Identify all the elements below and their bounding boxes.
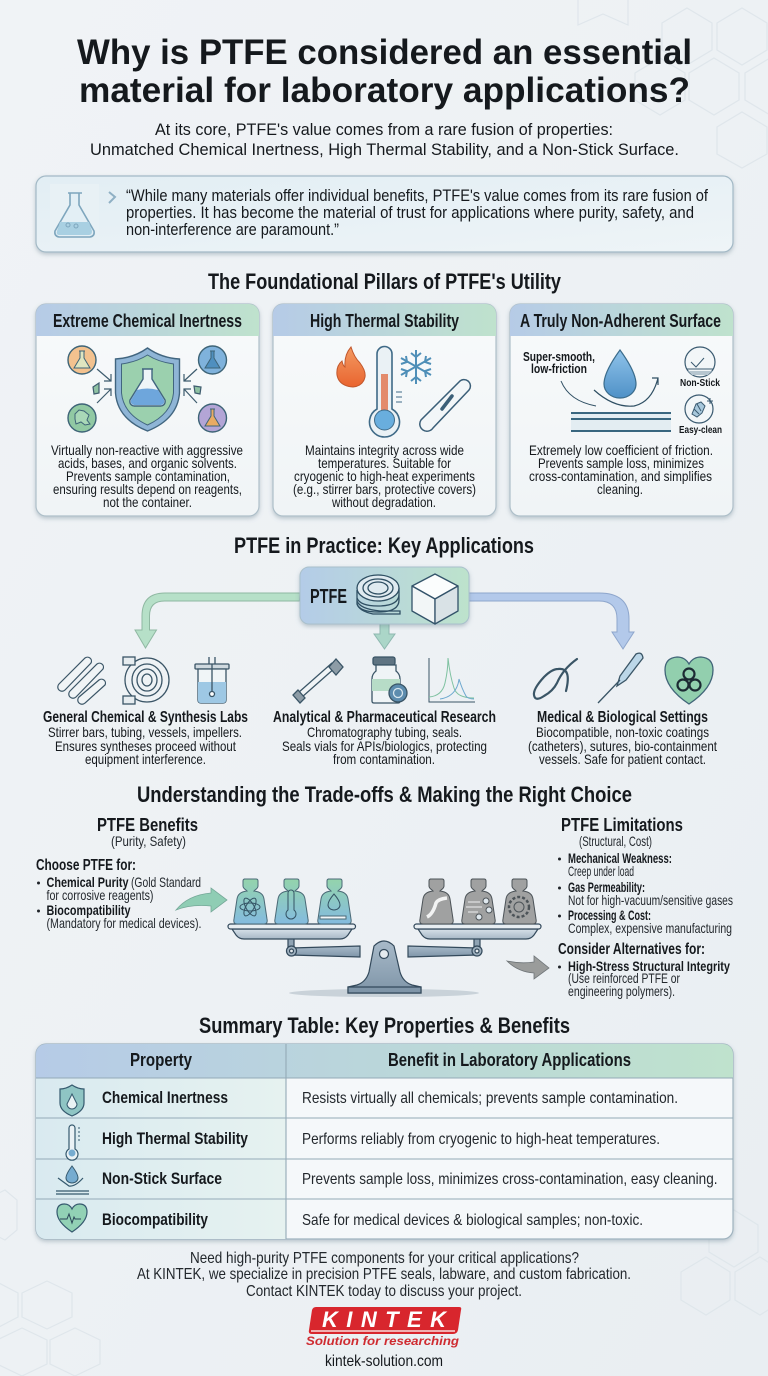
icon: tubing coil	[357, 575, 400, 614]
column text: Stirrer bars, tubing, vessels, impellers.	[48, 724, 242, 740]
panel: extreme chemical inertness	[36, 304, 259, 516]
column text: Biocompatible, non-toxic coatings	[536, 724, 709, 740]
box label: PTFE	[310, 586, 347, 608]
left pan	[228, 924, 356, 939]
title	[77, 33, 692, 110]
column text	[48, 724, 242, 767]
icon: easy-clean badge	[679, 395, 722, 436]
benefits list: Biocompatibility	[46, 902, 131, 918]
limitations list: Gas Permeability:	[568, 879, 645, 895]
card text	[293, 442, 476, 510]
column text: Chromatography tubing, seals.	[307, 724, 462, 740]
panel: non-adherent surface	[510, 304, 733, 516]
scale illustration	[228, 879, 541, 997]
table header: Property	[130, 1050, 192, 1070]
icon: biohazard heart	[665, 657, 713, 704]
card text: Extremely low coefficient of friction.	[529, 442, 713, 458]
heading: trade-offs: Understanding the Trade-offs & Making the Right Choice	[137, 782, 632, 807]
summary table	[36, 1044, 733, 1239]
row: chemical inertness: Chemical Inertness	[102, 1089, 228, 1107]
title: material for laboratory applications?	[79, 71, 690, 110]
call to action: Need high-purity PTFE components for your critical applications?	[190, 1250, 579, 1267]
limitations list: Processing & Cost:	[568, 907, 651, 923]
choose heading: Choose PTFE for:	[36, 857, 136, 874]
row: non-stick surface	[56, 1166, 718, 1194]
website: kintek-solution.com	[325, 1353, 443, 1370]
icon: non-stick badge	[680, 347, 720, 389]
arrow: limitations to alternatives	[507, 956, 549, 979]
icon: flask	[50, 184, 99, 244]
column title: General Chemical & Synthesis Labs	[43, 709, 248, 726]
column text: equipment interference.	[85, 751, 206, 767]
weights: limitations	[420, 879, 536, 924]
icon: shield with flask	[116, 348, 180, 431]
quote text: non-interference are paramount.”	[126, 220, 339, 239]
quote text: properties. It has become the material of trust for applications where purity, safety, and	[126, 203, 694, 222]
heading: applications: PTFE in Practice: Key Applications	[234, 533, 534, 558]
icon label	[523, 350, 595, 376]
column text	[282, 724, 487, 767]
call to action	[137, 1250, 631, 1300]
column text: vessels. Safe for patient contact.	[539, 751, 706, 767]
panel: general chemical labs	[43, 657, 248, 767]
arrow: to analytical research	[374, 624, 395, 649]
card text: (e.g., stirrer bars, protective covers)	[293, 481, 476, 497]
title: Why is PTFE considered an essential	[77, 33, 692, 72]
alternatives list: (Use reinforced PTFE or	[568, 970, 680, 986]
heading: pillars: The Foundational Pillars of PTFE's Utility	[208, 269, 562, 294]
beam and base	[286, 938, 482, 993]
row: chemical inertness: Resists virtually all chemicals; prevents sample contamination.	[302, 1090, 678, 1107]
card text: cross-contamination, and simplifies	[529, 468, 712, 484]
benefits list: (Gold Standard	[131, 874, 201, 890]
icon: PTFE cube	[412, 574, 458, 624]
row: non-stick surface: Non-Stick Surface	[102, 1170, 222, 1188]
panel: medical settings	[528, 653, 717, 767]
row: chemical inertness	[60, 1085, 678, 1116]
card text: Maintains integrity across wide	[305, 442, 464, 458]
right pan	[414, 924, 541, 939]
arrow: to medical settings	[469, 593, 634, 649]
row: high thermal stability: High Thermal Stability	[102, 1130, 249, 1148]
limitations heading: PTFE Limitations	[561, 815, 683, 835]
icon: catheter	[534, 659, 577, 699]
card text: not the container.	[103, 494, 192, 510]
icon: reagent circles	[68, 346, 226, 432]
table header	[36, 1044, 733, 1078]
icon: tubing	[123, 657, 169, 704]
panel: analytical research	[273, 657, 496, 767]
limitations list: Creep under load	[568, 863, 634, 879]
benefits list	[37, 874, 202, 931]
panel: high thermal stability	[273, 304, 496, 516]
icon: water drop on surface	[561, 350, 671, 431]
subtitle: At its core, PTFE's value comes from a rare fusion of properties:	[155, 121, 613, 139]
benefits list: for corrosive reagents)	[46, 887, 154, 903]
limitations list: Mechanical Weakness:	[568, 850, 672, 866]
benefits subtitle: (Purity, Safety)	[111, 833, 186, 849]
shadow	[289, 989, 479, 997]
card text	[529, 442, 713, 497]
card text: cryogenic to high-heat experiments	[294, 468, 475, 484]
card text: Virtually non-reactive with aggressive	[51, 442, 243, 458]
limitations list	[558, 850, 733, 936]
card heading: High Thermal Stability	[310, 311, 459, 331]
card text: ensuring results depend on reagents,	[53, 481, 242, 497]
weights: benefits	[234, 879, 351, 924]
icon: thermometer	[370, 346, 402, 437]
icon: chevron	[109, 192, 115, 203]
icon: stirrer bar	[420, 380, 470, 431]
column text: Ensures syntheses proceed without	[55, 738, 236, 754]
heading: summary table: Summary Table: Key Properties & Benefits	[199, 1013, 570, 1038]
icon: repelling arrows	[93, 369, 201, 403]
column text: from contamination.	[333, 751, 435, 767]
icon label: Super-smooth,	[523, 350, 595, 364]
row: high thermal stability: Performs reliably from cryogenic to high-heat temperatures.	[302, 1131, 660, 1148]
subtitle	[90, 121, 679, 159]
benefits list: Chemical Purity	[46, 874, 129, 890]
icon: stirrer bars	[58, 657, 105, 704]
card text	[51, 442, 243, 510]
icon: sealed vial	[372, 657, 407, 703]
panel: quote callout	[36, 176, 733, 252]
arrow: to chemical labs	[135, 593, 300, 648]
column text	[528, 724, 717, 767]
logo: KINTEK	[322, 1307, 448, 1332]
panel: PTFE limitations	[558, 815, 733, 999]
logo	[306, 1307, 461, 1348]
card heading: Extreme Chemical Inertness	[53, 311, 242, 331]
arrow: benefits to scale	[176, 888, 227, 912]
limitations subtitle: (Structural, Cost)	[579, 833, 652, 849]
column title: Analytical & Pharmaceutical Research	[273, 709, 496, 726]
card text: Prevents sample loss, minimizes	[538, 455, 704, 471]
call to action: Contact KINTEK today to discuss your project.	[246, 1283, 522, 1300]
row: high thermal stability	[66, 1125, 660, 1160]
panel: PTFE source box	[300, 567, 469, 624]
icon: non-stick badge: Non-Stick	[680, 377, 720, 389]
table header: Benefit in Laboratory Applications	[388, 1050, 631, 1070]
icon: chromatogram	[429, 658, 475, 702]
card text: cleaning.	[597, 481, 643, 497]
alternatives list	[558, 958, 730, 999]
column text: Seals vials for APIs/biologics, protecting	[282, 738, 487, 754]
icon: reactor vessel	[195, 657, 229, 703]
row: biocompatibility: Safe for medical devices & biological samples; non-toxic.	[302, 1212, 643, 1229]
icon: easy-clean badge: Easy-clean	[679, 424, 722, 436]
icon: snowflake	[401, 350, 431, 384]
row: biocompatibility	[57, 1204, 643, 1232]
icon label: low-friction	[531, 362, 587, 376]
alternatives list: engineering polymers).	[568, 983, 675, 999]
icon: dropper	[598, 653, 643, 703]
icon: flame	[337, 347, 365, 387]
subtitle: Unmatched Chemical Inertness, High Thermal Stability, and a Non-Stick Surface.	[90, 141, 679, 159]
column text: (catheters), sutures, bio-containment	[528, 738, 717, 754]
alternatives heading: Consider Alternatives for:	[558, 941, 705, 958]
call to action: At KINTEK, we specialize in precision PTFE seals, labware, and custom fabrication.	[137, 1266, 631, 1283]
property column shading	[36, 1078, 286, 1239]
quote text	[126, 186, 708, 239]
logo: Solution for researching	[306, 1334, 460, 1348]
panel: PTFE benefits	[36, 815, 202, 931]
card text: acids, bases, and organic solvents.	[58, 455, 237, 471]
benefits list: (Mandatory for medical devices).	[46, 915, 202, 931]
card text: Prevents sample contamination,	[66, 468, 230, 484]
column title: Medical & Biological Settings	[537, 709, 708, 726]
benefits heading: PTFE Benefits	[97, 815, 198, 835]
icon: chromatography column	[293, 659, 343, 703]
row: biocompatibility: Biocompatibility	[102, 1211, 209, 1229]
card text: without degradation.	[331, 494, 436, 510]
card text: temperatures. Suitable for	[318, 455, 451, 471]
